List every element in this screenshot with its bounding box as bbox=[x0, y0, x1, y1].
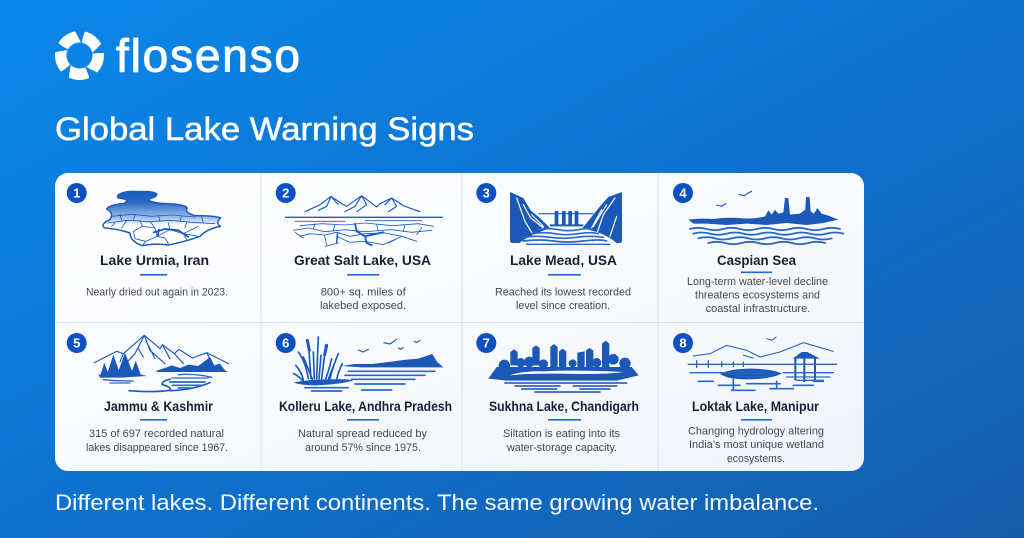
panel: Caspian Sea bbox=[673, 183, 843, 315]
description: threatens ecosystems and bbox=[695, 290, 820, 302]
description bbox=[503, 428, 620, 454]
description bbox=[687, 276, 828, 315]
logo: flosenso swirl icon bbox=[52, 28, 107, 81]
badge: 4 bbox=[673, 183, 693, 203]
description bbox=[86, 428, 228, 454]
panel: Kolleru Lake bbox=[276, 333, 452, 454]
description bbox=[298, 428, 427, 454]
badge: 3 bbox=[476, 183, 496, 203]
description: Natural spread reduced by bbox=[298, 428, 427, 440]
badge: 8: 8 bbox=[679, 336, 687, 351]
badge: 3: 3 bbox=[483, 186, 490, 201]
illustration: sea waves, coast and lighthouses bbox=[688, 191, 843, 244]
description: around 57% since 1975. bbox=[305, 442, 421, 454]
name: Sukhna Lake, Chandigarh bbox=[489, 399, 639, 414]
panel: Lake Mead bbox=[476, 183, 631, 312]
description: coastal infrastructure. bbox=[706, 303, 810, 315]
badge: 6: 6 bbox=[282, 336, 289, 351]
badge: 2: 2 bbox=[282, 186, 289, 201]
panel: Lake Urmia bbox=[67, 183, 228, 298]
description: level since creation. bbox=[516, 300, 610, 312]
name: Caspian Sea bbox=[717, 253, 796, 268]
rule bbox=[140, 419, 167, 421]
description: lakebed exposed. bbox=[320, 300, 406, 312]
description: ecosystems. bbox=[727, 453, 785, 465]
brand name: flosenso bbox=[116, 30, 300, 82]
badge: 5 bbox=[67, 333, 87, 353]
description bbox=[320, 287, 407, 312]
panel: Great Salt Lake bbox=[276, 183, 443, 312]
illustration: cracked lakebed with remaining water bbox=[103, 191, 221, 246]
illustration: city skyline on lake bbox=[488, 341, 639, 392]
badge: 7: 7 bbox=[483, 336, 490, 351]
illustration: phumdis, pavilion and wetland bbox=[688, 337, 837, 390]
description: water-storage capacity. bbox=[506, 442, 617, 454]
panel: Sukhna Lake bbox=[476, 333, 639, 454]
description: Nearly dried out again in 2023. bbox=[86, 286, 228, 298]
illustration: canyon, dam and low water bbox=[510, 192, 622, 244]
footer tagline: Different lakes. Different continents. The same growing water imbalance. bbox=[55, 490, 819, 515]
rule bbox=[548, 274, 581, 276]
title: Global Lake Warning Signs bbox=[55, 111, 474, 147]
badge: 1: 1 bbox=[73, 186, 80, 201]
description: India’s most unique wetland bbox=[689, 439, 824, 451]
badge: 2 bbox=[276, 183, 296, 203]
illustration: mountains and cracked lakebed bbox=[285, 196, 443, 246]
badge: 6 bbox=[276, 333, 296, 353]
description: lakes disappeared since 1967. bbox=[86, 442, 228, 454]
name: Lake Urmia, Iran bbox=[100, 253, 209, 268]
rule bbox=[140, 274, 167, 276]
description: 315 of 697 recorded natural bbox=[89, 428, 224, 440]
description: Long-term water-level decline bbox=[687, 276, 828, 288]
name: Lake Mead, USA bbox=[510, 253, 617, 268]
panel: Loktak Lake bbox=[673, 333, 837, 465]
rule bbox=[347, 274, 379, 276]
name: Loktak Lake, Manipur bbox=[692, 399, 820, 414]
rule bbox=[741, 419, 772, 421]
badge: 5: 5 bbox=[73, 336, 80, 351]
illustration: reeds, birds and shoreline bbox=[293, 337, 443, 391]
description bbox=[688, 426, 824, 465]
name: Jammu & Kashmir bbox=[104, 399, 214, 414]
badge: 1 bbox=[67, 183, 87, 203]
badge: 7 bbox=[476, 333, 496, 353]
name: Kolleru Lake, Andhra Pradesh bbox=[279, 399, 452, 414]
rule bbox=[741, 272, 772, 273]
description: Siltation is eating into its bbox=[503, 428, 620, 440]
panel: Jammu and Kashmir bbox=[67, 333, 228, 454]
description: Changing hydrology altering bbox=[688, 426, 824, 438]
rule bbox=[548, 419, 581, 421]
description: 800+ sq. miles of bbox=[321, 287, 407, 299]
rule bbox=[347, 419, 379, 421]
illustration: mountains, pines and lake bbox=[94, 335, 228, 392]
name: Great Salt Lake, USA bbox=[294, 253, 431, 268]
panel: card background bbox=[55, 173, 864, 471]
description: Reached its lowest recorded bbox=[495, 287, 631, 299]
badge: 4: 4 bbox=[679, 186, 687, 201]
badge: 8 bbox=[673, 333, 693, 353]
description bbox=[495, 287, 631, 312]
